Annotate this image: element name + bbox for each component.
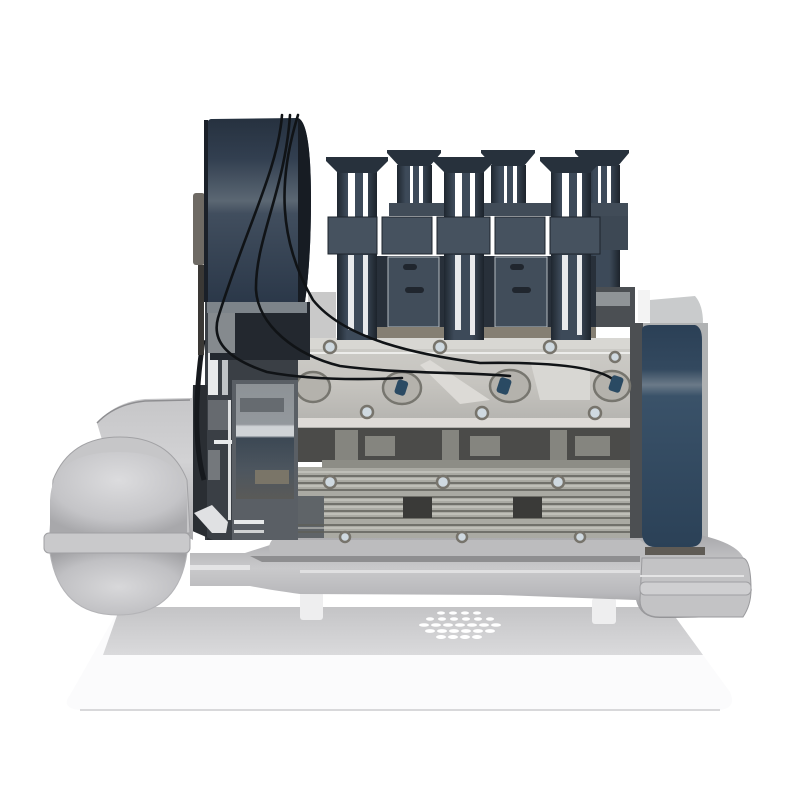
rear carburetor stacks [387, 150, 629, 287]
throttle bodies [376, 256, 596, 340]
rear blue fan cover [642, 325, 702, 547]
ignition wires [217, 115, 616, 382]
silver muffler [44, 398, 193, 615]
mount posts [300, 592, 616, 624]
silver chassis plate [190, 535, 752, 618]
bolts [324, 341, 620, 542]
ribbed lower crankcase [298, 460, 630, 540]
spark plug recesses [296, 370, 630, 404]
speaker holes [419, 611, 501, 639]
cooling fan and belt [193, 118, 311, 360]
spark plug caps [394, 375, 624, 396]
rear clear housing top [590, 287, 708, 538]
front manifold blocks [326, 157, 602, 340]
clear cam cover behind stacks [308, 292, 336, 345]
cylinder head clear cover [298, 338, 630, 428]
mid engine band [298, 428, 630, 462]
white display base [67, 607, 732, 711]
timing cover and left pulleys [190, 300, 298, 540]
